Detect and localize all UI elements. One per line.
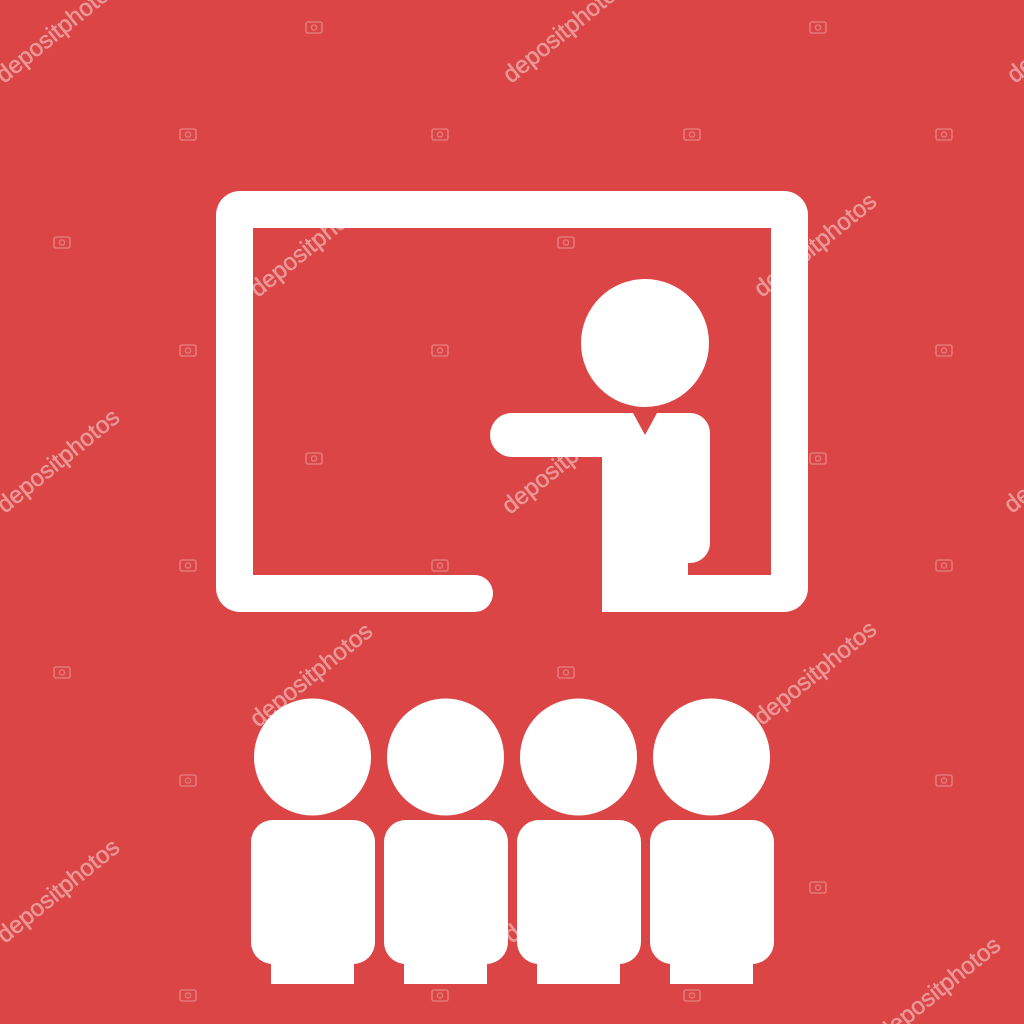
- watermark text: depositphotos: [749, 188, 882, 303]
- watermark text: depositphotos: [499, 834, 632, 949]
- icon: students row: [251, 698, 774, 984]
- icon: presentation board: [216, 191, 808, 612]
- student 2: [384, 698, 508, 984]
- student 3: [517, 698, 641, 984]
- watermark text: depositphotos: [245, 188, 378, 303]
- watermark text: depositphotos: [749, 616, 882, 731]
- watermark text: depositphotos: [245, 618, 378, 733]
- student 1: [251, 698, 375, 984]
- student 4: [650, 698, 774, 984]
- teacher head: [581, 279, 709, 407]
- teacher body with pointing arm: [490, 413, 710, 612]
- watermark text: depositphotos: [497, 405, 630, 520]
- icon: teacher: [490, 279, 710, 612]
